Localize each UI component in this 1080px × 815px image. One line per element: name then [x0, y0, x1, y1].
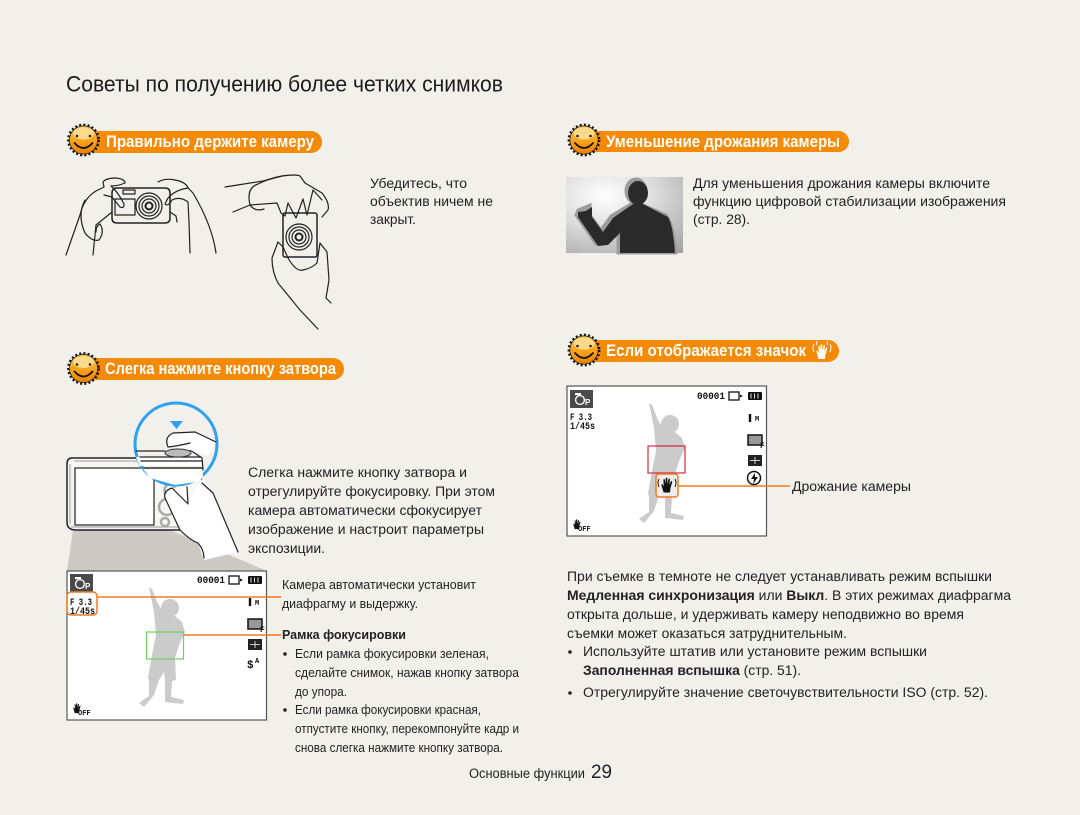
text: make sure the lens is clear: закрыт.: [370, 212, 416, 228]
text: make sure the lens is clear: [370, 176, 493, 228]
text: focus frame notes: Если рамка фокусировки зеленая,: [295, 647, 489, 661]
footer: page number: Основные функции: [469, 766, 585, 781]
camera screen: green focus frame: A: [255, 658, 260, 666]
text: shooting in the dark: Медленная синхронизация или Выкл. В этих режимах диафрагма: [567, 588, 1011, 604]
text: focus frame notes: Рамка фокусировки: [282, 628, 406, 642]
text: half-press instructions: изображение и настроит параметры: [248, 522, 484, 538]
text: digital stabilization: [693, 176, 1006, 228]
camera screen: shake warning: 1/45s: [570, 421, 595, 433]
text: focus frame notes: сделайте снимок, нажав кнопку затвора: [295, 666, 519, 680]
camera screen: green focus frame: $: [247, 660, 254, 672]
photo: blurred silhouette: [566, 177, 683, 253]
text: exposure note: диафрагму и выдержку.: [282, 597, 418, 611]
illustration: camera back with finger on shutter: [67, 403, 267, 571]
blue magnifier circle: [135, 403, 217, 485]
camera screen: green focus frame: F 3.3: [70, 597, 92, 609]
camera screen: green focus frame: [67, 571, 281, 720]
heading: reduce camera shake: [569, 125, 849, 155]
text: exposure note: [282, 578, 476, 611]
camera screen: shake warning: [567, 386, 790, 536]
text: focus frame notes: [282, 628, 519, 755]
text: shooting in the dark: Отрегулируйте значение светочувствительности ISO (стр. 52).: [583, 685, 988, 701]
text: focus frame notes: Если рамка фокусировки красная,: [295, 703, 481, 717]
text: shooting in the dark: открыта дольше, и удерживать камеру неподвижно во время: [567, 607, 964, 623]
text: half-press instructions: отрегулируйте фокусировку. При этом: [248, 484, 495, 500]
text: make sure the lens is clear: Убедитесь, что: [370, 176, 467, 192]
text: shooting in the dark: Заполненная вспышка (стр. 51).: [583, 663, 801, 679]
text: digital stabilization: Для уменьшения дрожания камеры включите: [693, 176, 990, 192]
heading: hold the camera correctly: Правильно держите камеру: [106, 133, 315, 151]
footer: page number: [469, 762, 612, 783]
text: shooting in the dark: [567, 569, 1011, 701]
heading: half-press the shutter: [68, 353, 344, 384]
text: focus frame notes: снова слегка нажмите кнопку затвора.: [295, 741, 503, 755]
text: shooting in the dark: съемки может оказаться затруднительным.: [567, 626, 847, 642]
text: shooting in the dark: Используйте штатив или установите режим вспышки: [583, 644, 927, 660]
text: make sure the lens is clear: объектив ничем не: [370, 194, 493, 210]
heading: if the icon is displayed: Если отображается значок: [606, 342, 807, 360]
label: camera shake: Дрожание камеры: [792, 479, 911, 495]
title: Советы по получению более четких снимков: [66, 72, 503, 96]
text: focus frame notes: отпустите кнопку, перекомпонуйте кадр и: [295, 722, 519, 736]
illustration: camera held horizontally: [66, 178, 216, 255]
text: shooting in the dark: При съемке в темноте не следует устанавливать режим вспышки: [567, 569, 992, 585]
camera screen: green focus frame: 1/45s: [70, 606, 95, 618]
heading: if the icon is displayed: [569, 335, 839, 365]
illustration: camera held vertically: [225, 175, 331, 329]
heading: reduce camera shake: Уменьшение дрожания камеры: [606, 133, 840, 151]
heading: hold the camera correctly: [68, 125, 322, 155]
text: digital stabilization: (стр. 28).: [693, 212, 750, 228]
camera screen: shake warning: F 3.3: [570, 412, 592, 424]
footer: page number: 29: [591, 762, 612, 783]
text: focus frame notes: до упора.: [295, 685, 347, 699]
text: digital stabilization: функцию цифровой стабилизации изображения: [693, 194, 1006, 210]
text: exposure note: Камера автоматически установит: [282, 578, 476, 592]
text: half-press instructions: камера автоматически сфокусирует: [248, 503, 482, 519]
text: half-press instructions: экспозиции.: [248, 541, 325, 557]
text: half-press instructions: [248, 465, 495, 557]
heading: half-press the shutter: Слегка нажмите кнопку затвора: [105, 360, 337, 378]
text: half-press instructions: Слегка нажмите кнопку затвора и: [248, 465, 467, 481]
